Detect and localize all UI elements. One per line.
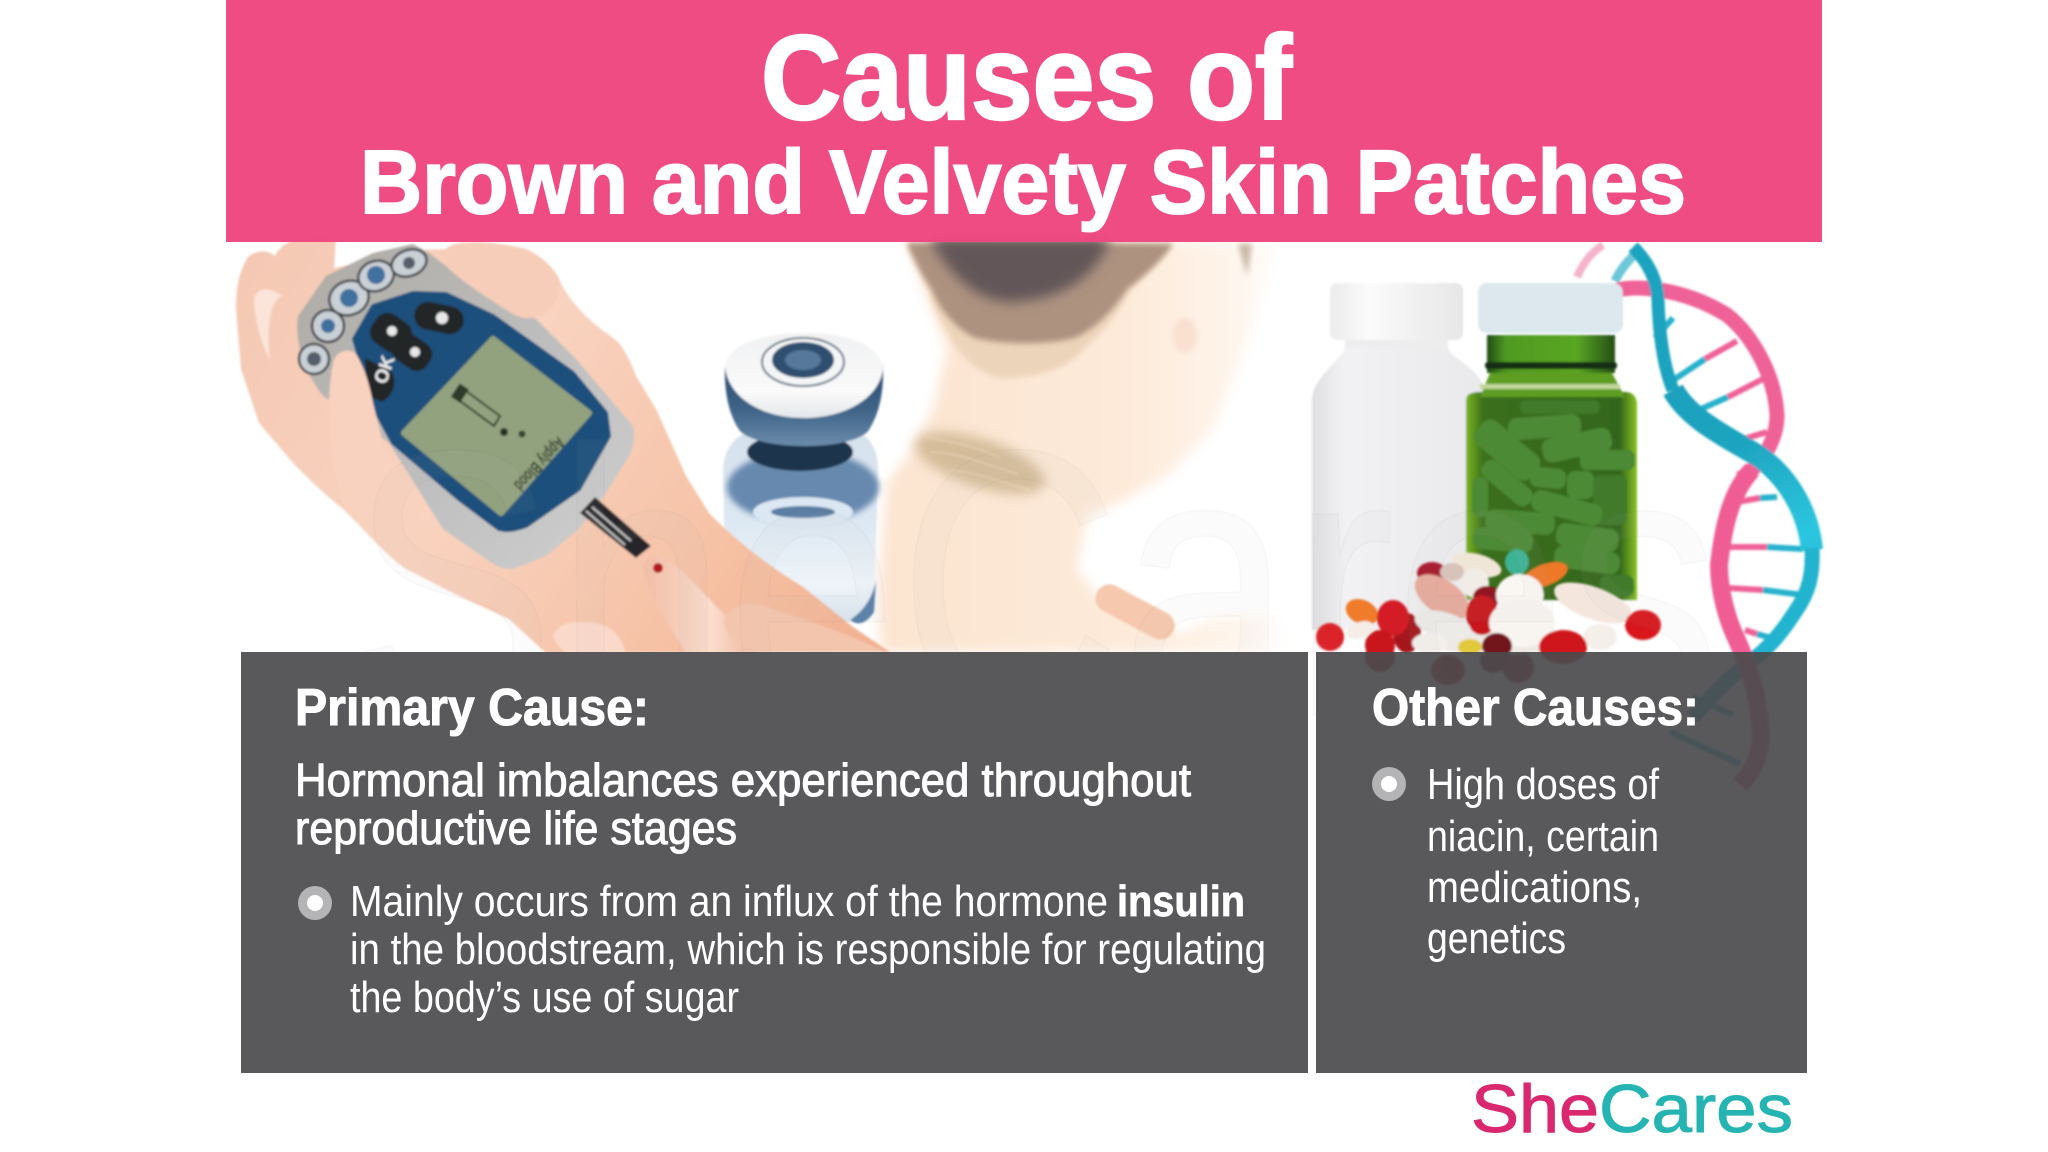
subheading: hormonal imbalances: [295, 754, 1191, 854]
green bottle: [1466, 283, 1637, 600]
meter body: [297, 244, 634, 569]
logo: SheCares: Cares: [1599, 1071, 1793, 1147]
photo: hand holding blood glucose meter: [236, 238, 890, 653]
LCD readout: Apply Blood: [510, 433, 569, 494]
photo: DNA double helix: [1577, 245, 1812, 785]
bullet text: other causes list: [1427, 760, 1660, 963]
upper finger over meter: [445, 243, 559, 318]
meter LCD screen: [404, 339, 589, 513]
watermark: large faint SheCares logo: SheCares: [350, 371, 1720, 796]
liquid meniscus: [727, 451, 879, 523]
bullet text: other causes list: medications,: [1427, 863, 1642, 912]
bullet text: insulin: insulin: [1117, 877, 1245, 926]
bullet text: other causes list: niacin, certain: [1427, 812, 1659, 861]
blue band: [725, 366, 883, 446]
logo: SheCares: [1471, 1071, 1793, 1147]
subheading: hormonal imbalances: Hormonal imbalances experienced throughout: [295, 754, 1191, 806]
lower finger: [553, 622, 626, 653]
meter black buttons: [365, 299, 466, 402]
panel: other causes: [1316, 652, 1807, 1073]
white cap: [725, 333, 883, 418]
photo: pile of coloured pills: [1316, 548, 1661, 685]
pink strand, lower turn: [1719, 470, 1760, 785]
bullet text: insulin: in the bloodstream, which is responsible for regulating: [350, 925, 1266, 974]
bullet text: other causes list: High doses of: [1427, 760, 1660, 809]
panel: primary cause: [241, 652, 1308, 1073]
bullet icon: [1372, 767, 1406, 801]
thumb over meter: [329, 351, 430, 566]
blood drop: [653, 563, 663, 573]
photo: white and green pill bottles: [1312, 283, 1637, 630]
green tablets: [1470, 400, 1635, 597]
white bottle: [1312, 283, 1484, 630]
hand: [236, 238, 890, 653]
meter blue face: [354, 293, 609, 530]
logo: SheCares: She: [1471, 1071, 1599, 1147]
title line 2: Brown and Velvety Skin Patches: [360, 133, 1686, 233]
photo: woman's neck with darkened patch: [880, 238, 1297, 652]
bullet text: insulin: Mainly occurs from an influx of the hormone: [350, 877, 1108, 926]
photo: insulin vial: [723, 333, 883, 623]
title: [360, 11, 1686, 233]
cyan strand: [1633, 247, 1673, 390]
heading: other causes: Other Causes:: [1372, 679, 1699, 737]
stopper: [762, 338, 844, 386]
meter black buttons: OK: [371, 353, 400, 387]
bullet text: insulin: [350, 877, 1266, 1022]
heading: primary cause: Primary Cause:: [295, 679, 649, 737]
meter round buttons: [299, 245, 430, 374]
rubber neck: [747, 433, 853, 471]
header banner: [226, 0, 1822, 242]
lower thumb: [724, 604, 885, 652]
DNA rungs: [1655, 318, 1803, 764]
bullet text: insulin: the body’s use of sugar: [350, 973, 739, 1022]
finger highlight: [254, 289, 282, 360]
bullet text: other causes list: genetics: [1427, 914, 1566, 963]
test strip: [580, 497, 651, 558]
subheading: hormonal imbalances: reproductive life stages: [295, 802, 737, 854]
lancing finger: [643, 556, 756, 653]
LCD readout: [451, 383, 569, 494]
glass body: [723, 430, 878, 623]
pink strand: [1617, 288, 1777, 479]
bullet icon: [298, 886, 332, 920]
title line 1: Causes of: [761, 11, 1293, 145]
